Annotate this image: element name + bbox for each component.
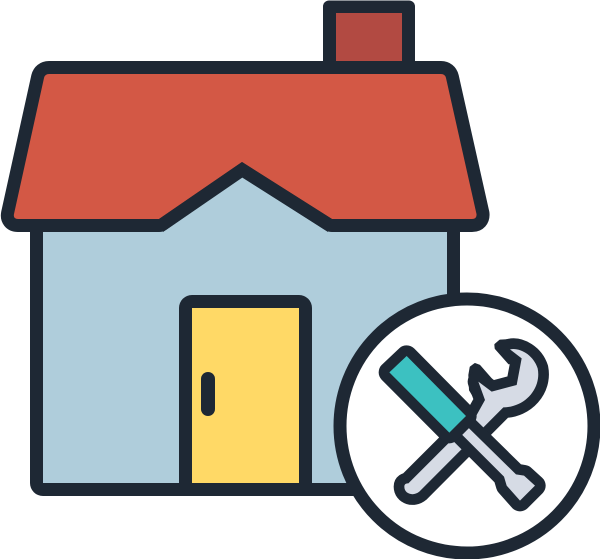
house wall	[43, 150, 447, 483]
icon: chimney	[323, 0, 415, 70]
icon: wrench	[404, 340, 538, 494]
door handle	[201, 372, 215, 416]
door	[192, 308, 299, 483]
icon: screwdriver	[389, 356, 535, 501]
screwdriver shaft and blade	[460, 427, 535, 501]
badge circle	[340, 299, 594, 553]
roof	[14, 74, 477, 232]
screwdriver teal handle	[389, 356, 466, 433]
icon: crossed wrench and screwdriver	[389, 340, 538, 501]
